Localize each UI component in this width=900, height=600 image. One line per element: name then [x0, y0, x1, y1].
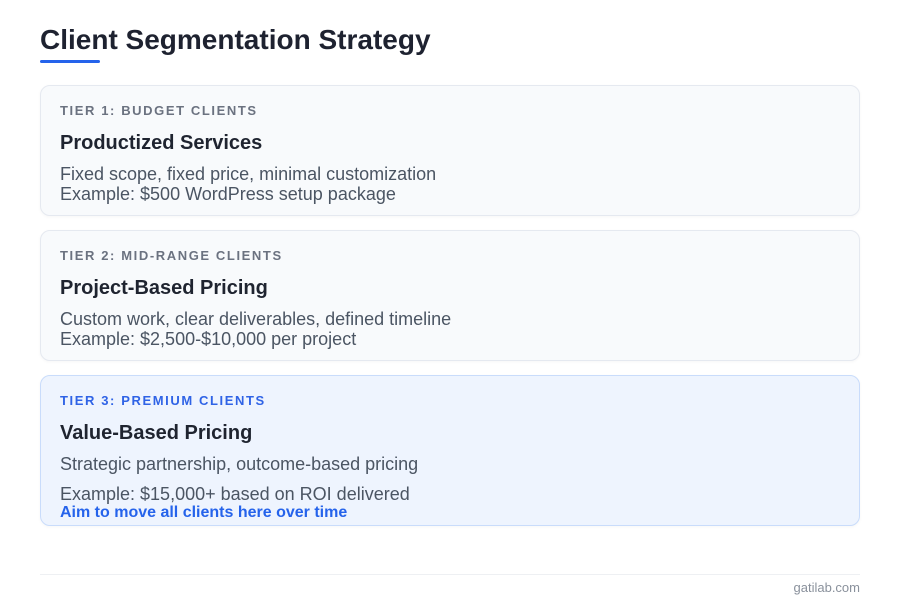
tier 1 description [60, 164, 436, 204]
title underline [40, 60, 100, 63]
tier 1 label: TIER 1: BUDGET CLIENTS [60, 103, 258, 118]
tier 3 label: TIER 3: PREMIUM CLIENTS [60, 393, 266, 408]
panel: tier 2 [40, 230, 860, 361]
tier 2 description [60, 309, 451, 349]
title: Client Segmentation Strategy [40, 24, 431, 55]
panel: tier 3 [40, 375, 860, 526]
tier 1 description: Fixed scope, fixed price, minimal customization [60, 164, 436, 184]
tier 3 callout: Aim to move all clients here over time [60, 504, 347, 521]
tier 2 label: TIER 2: MID-RANGE CLIENTS [60, 248, 283, 263]
tier 3 heading: Value-Based Pricing [60, 422, 252, 444]
tier 2 description: Example: $2,500-$10,000 per project [60, 329, 356, 349]
tier 2 description: Custom work, clear deliverables, defined timeline [60, 309, 451, 329]
tier 1 description: Example: $500 WordPress setup package [60, 184, 396, 204]
tier 3 description: Strategic partnership, outcome-based pricing [60, 454, 418, 474]
footer credit: gatilab.com [794, 580, 860, 595]
panel: tier 1 [40, 85, 860, 216]
tier 3 example: Example: $15,000+ based on ROI delivered [60, 484, 410, 504]
tier 1 heading: Productized Services [60, 132, 262, 154]
tier 2 heading: Project-Based Pricing [60, 277, 268, 299]
